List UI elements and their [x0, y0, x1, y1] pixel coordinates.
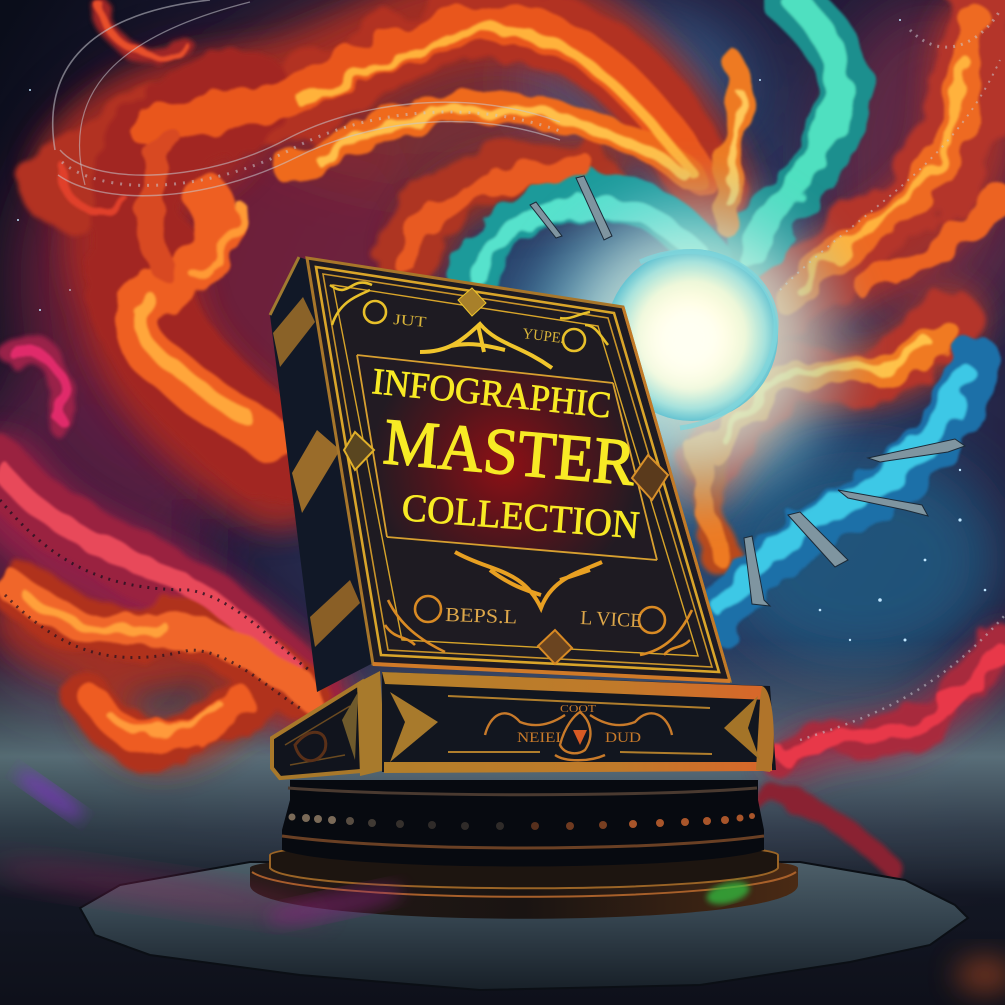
pedestal drum — [282, 780, 764, 866]
INFOGRAPHIC: INFOGRAPHIC — [370, 361, 613, 427]
bottom crest ornament — [455, 552, 602, 608]
band ornament — [485, 712, 672, 760]
small cover labels: L VICE — [580, 607, 643, 632]
book band base: COOT — [560, 704, 596, 715]
book band base — [272, 671, 776, 778]
left diamond — [344, 432, 374, 470]
top crest ornament — [420, 324, 552, 368]
pedestal base plate — [250, 854, 798, 919]
glowing orb — [505, 160, 875, 530]
book — [270, 257, 730, 692]
flames: blurred colour mass — [0, 15, 1005, 760]
band arrow ornaments — [390, 692, 438, 762]
book spine — [270, 257, 373, 692]
cover title — [370, 361, 641, 547]
flames: teal and cyan streams — [470, 0, 975, 620]
small cover labels: BEPS.L — [445, 604, 518, 629]
band left wing — [272, 682, 372, 778]
flames: yellow highlights — [30, 30, 965, 733]
pedestal beads — [288, 813, 755, 830]
small cover labels — [393, 312, 643, 632]
flames: orange mid layer — [5, 5, 1003, 755]
book band base: DUD — [605, 730, 641, 746]
cover red panel — [357, 355, 657, 560]
bottom light streaks — [0, 764, 1005, 993]
corner curls — [330, 283, 692, 655]
right diamond — [632, 455, 668, 500]
floating shards — [530, 176, 965, 606]
bottom diamond — [538, 630, 572, 664]
band main block — [382, 672, 776, 772]
stone platform — [80, 862, 968, 990]
pedestal — [250, 780, 798, 919]
film strip ribbons — [0, 0, 1005, 740]
small cover labels: JUT — [393, 312, 427, 331]
pedestal upper plate — [270, 842, 778, 888]
cover frames — [316, 267, 719, 672]
small cover labels: YUPE. — [522, 326, 565, 347]
book cover — [307, 258, 730, 681]
band rules — [448, 696, 712, 754]
band lettering: NEIEI — [517, 730, 561, 746]
COLLECTION: COLLECTION — [400, 486, 641, 547]
MASTER: MASTER — [381, 405, 638, 500]
top diamond — [458, 288, 486, 316]
cover edge highlight — [623, 307, 730, 681]
stars — [17, 19, 986, 642]
